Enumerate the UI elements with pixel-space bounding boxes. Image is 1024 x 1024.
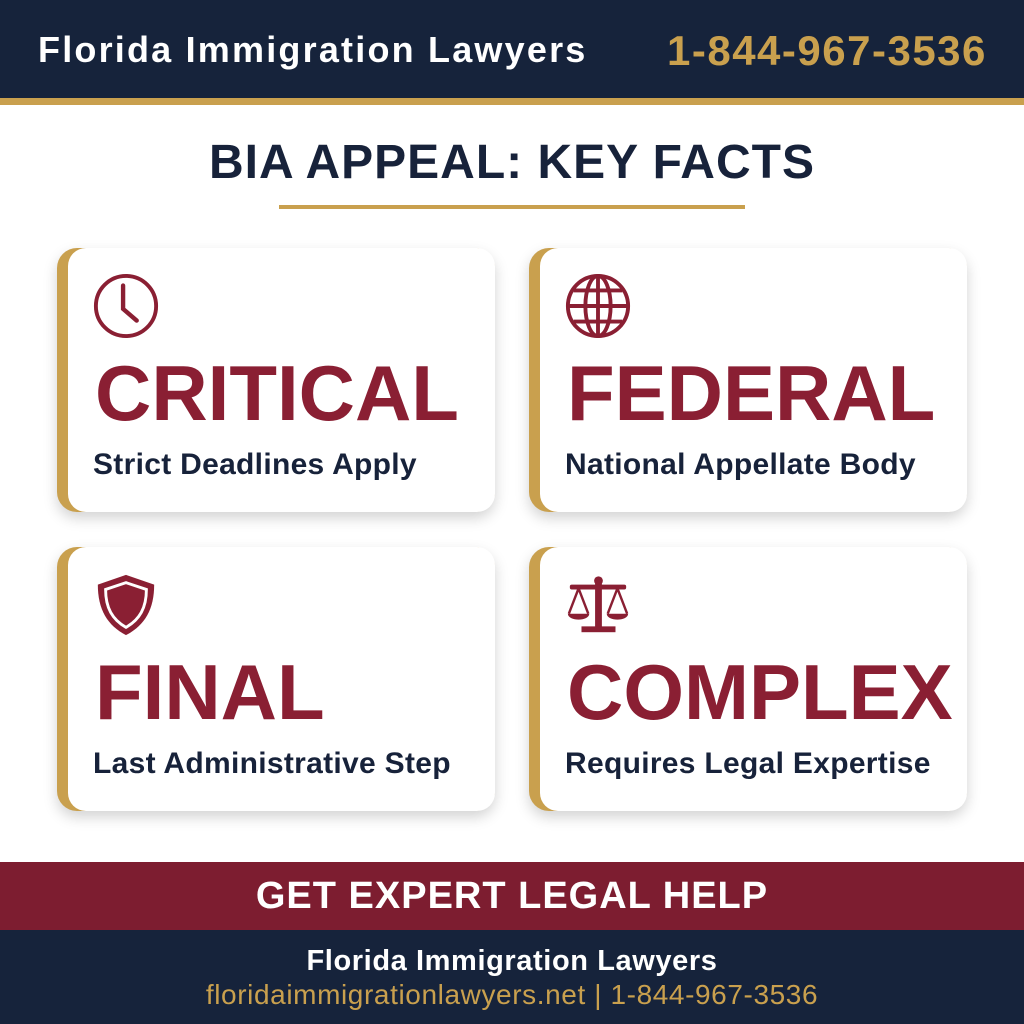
icon: clock (94, 274, 158, 338)
big word: FEDERAL (567, 349, 935, 437)
cta banner (0, 862, 1024, 930)
subtitle: Last Administrative Step (93, 747, 451, 780)
header phone: 1-844-967-3536 (667, 27, 987, 74)
card: federal (529, 248, 967, 512)
icon: globe (566, 274, 630, 338)
card: critical (57, 248, 495, 512)
footer contact: floridaimmigrationlawyers.net | 1-844-967-3536 (206, 979, 818, 1010)
header bar (0, 0, 1024, 98)
cta banner: GET EXPERT LEGAL HELP (256, 875, 768, 917)
subtitle: Requires Legal Expertise (565, 747, 931, 780)
title: BIA APPEAL: KEY FACTS (209, 136, 815, 189)
header firm name: Florida Immigration Lawyers (38, 29, 588, 70)
card: complex (529, 547, 967, 811)
icon: scales (568, 576, 628, 632)
subtitle: National Appellate Body (565, 448, 916, 481)
footer (0, 930, 1024, 1024)
big word: CRITICAL (95, 349, 459, 437)
icon: shield (98, 574, 154, 636)
big word: FINAL (95, 648, 325, 736)
footer name: Florida Immigration Lawyers (306, 945, 718, 977)
big word: COMPLEX (567, 648, 953, 736)
subtitle: Strict Deadlines Apply (93, 448, 417, 481)
card: final (57, 547, 495, 811)
